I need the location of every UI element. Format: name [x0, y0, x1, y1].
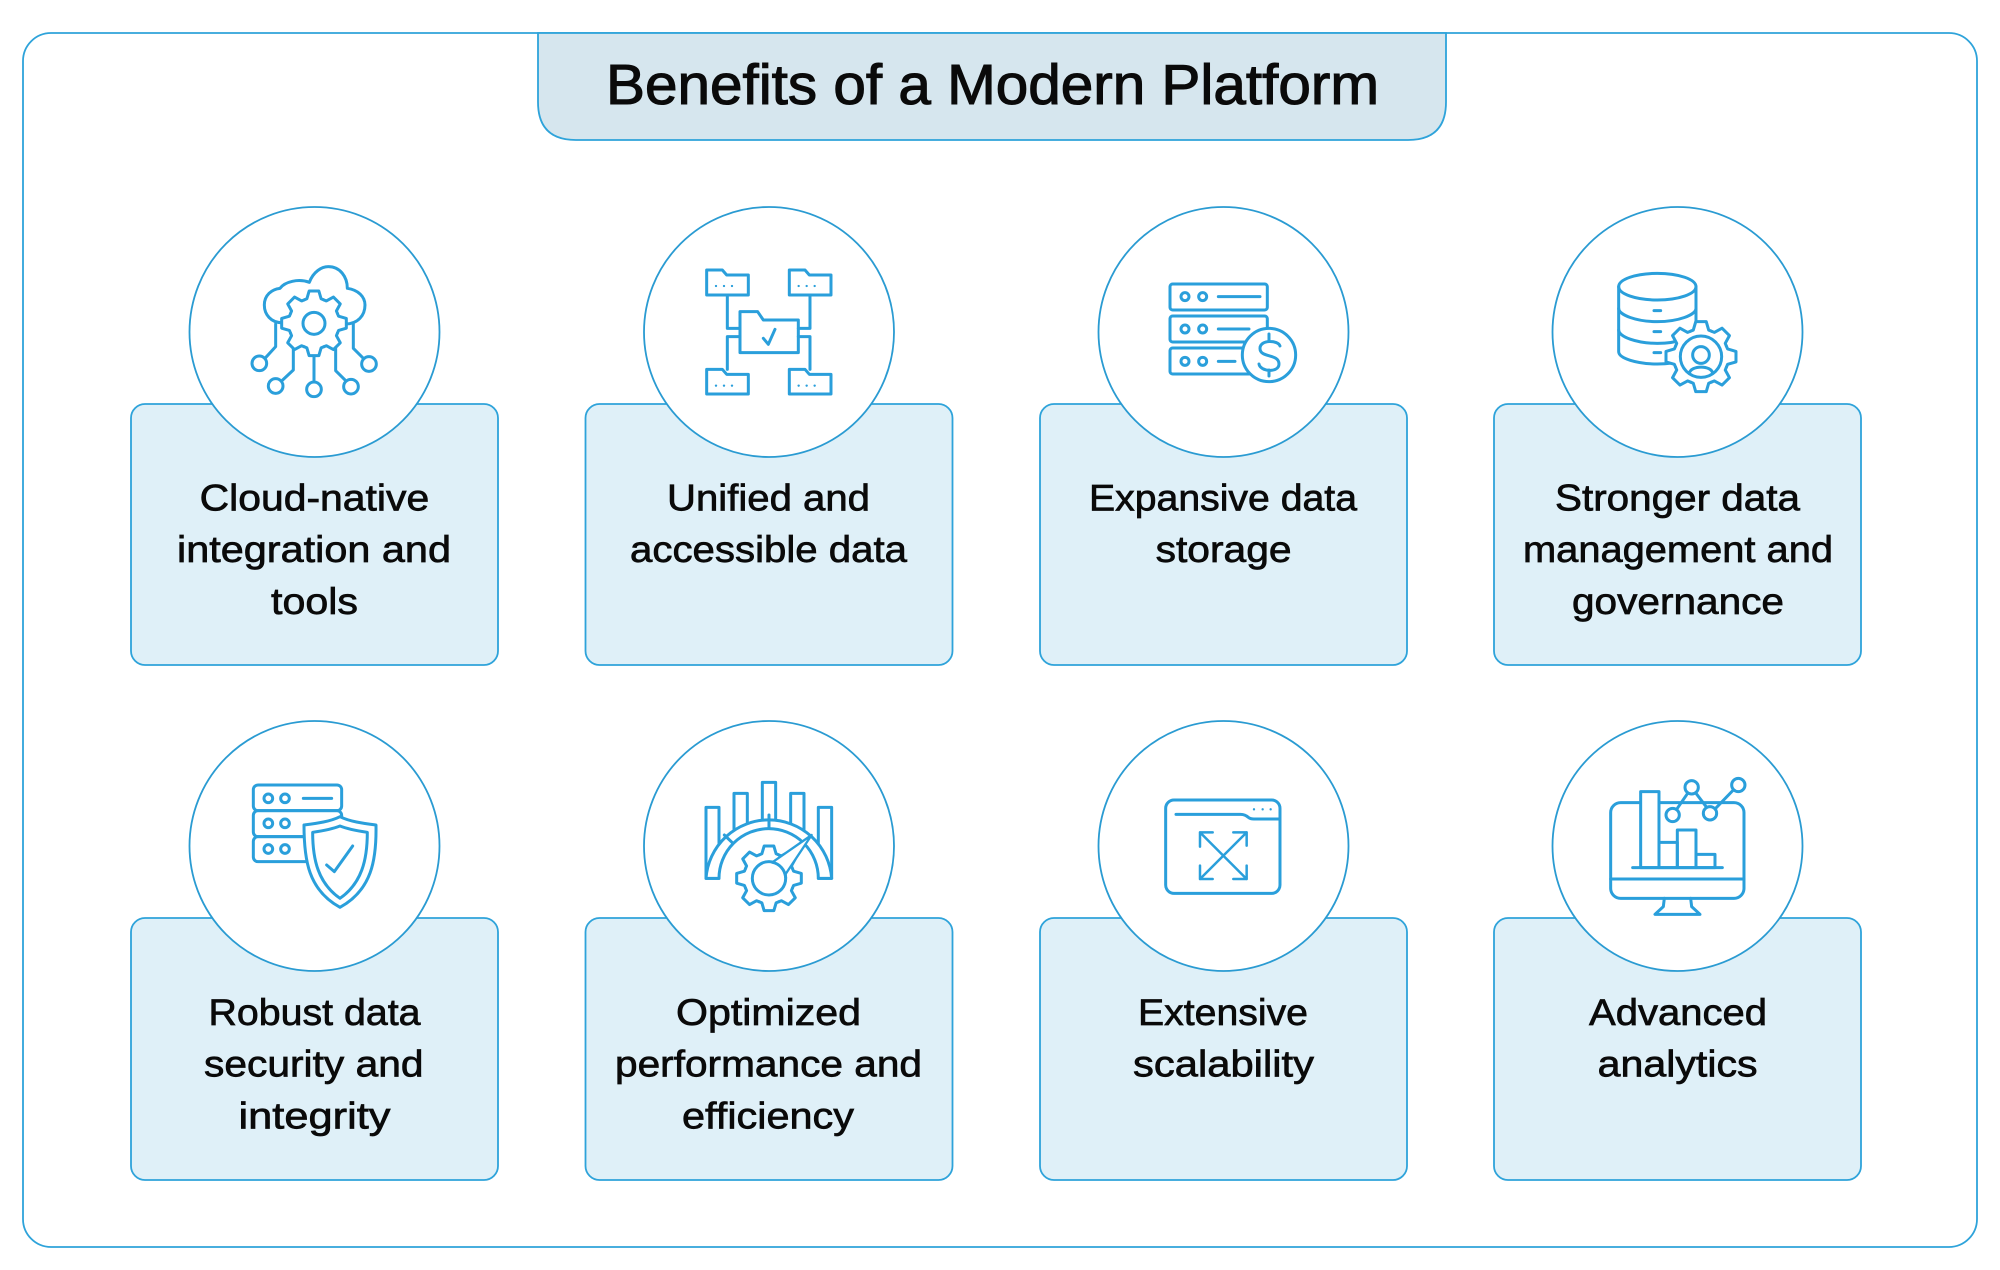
- panel: data governance: [1494, 207, 1861, 665]
- card background: [1040, 404, 1407, 665]
- label: Expansive data: [1089, 478, 1357, 518]
- card background: [1494, 404, 1861, 665]
- card background: [131, 918, 498, 1180]
- icon: gauge with gear and bars: [706, 782, 832, 911]
- panel: expansive storage: [1040, 207, 1407, 665]
- label: governance: [1572, 581, 1784, 622]
- label: [204, 992, 424, 1136]
- label: accessible data: [630, 529, 907, 570]
- card background: [1040, 918, 1407, 1180]
- label: analytics: [1598, 1044, 1758, 1084]
- icon circle: [1098, 721, 1348, 971]
- label: [1589, 992, 1767, 1084]
- label: security and: [204, 1044, 424, 1084]
- label: [615, 992, 922, 1136]
- label: storage: [1156, 529, 1292, 570]
- label: Unified and: [667, 478, 870, 518]
- label: [1523, 478, 1833, 622]
- label: [177, 478, 451, 622]
- label: [1089, 478, 1357, 570]
- card background: [1494, 918, 1861, 1180]
- icon: servers with shield: [253, 785, 376, 907]
- label: management and: [1523, 529, 1833, 570]
- panel: scalability: [1040, 721, 1407, 1180]
- card background: [586, 404, 952, 665]
- label: Optimized: [676, 992, 861, 1033]
- label: Cloud-native: [200, 478, 429, 518]
- label: integrity: [238, 1096, 391, 1136]
- label: scalability: [1133, 1044, 1315, 1084]
- label: [630, 478, 907, 570]
- icon circle: [644, 721, 894, 971]
- panel: analytics: [1494, 721, 1861, 1180]
- icon circle: [1552, 721, 1802, 971]
- icon: connected folders: [707, 270, 831, 394]
- card background: [586, 918, 952, 1180]
- label: Stronger data: [1555, 478, 1800, 518]
- icon: browser window with expand arrows: [1166, 800, 1280, 893]
- icon circle: [1098, 207, 1348, 457]
- icon circle: [1552, 207, 1802, 457]
- icon: cloud with gear and nodes: [252, 267, 376, 397]
- icon circle: [190, 721, 440, 971]
- panel: unified data: [586, 207, 952, 665]
- label: Advanced: [1589, 992, 1767, 1033]
- label: performance and: [615, 1044, 922, 1084]
- panel: data security: [131, 721, 498, 1180]
- icon: servers with dollar coin: [1170, 284, 1296, 382]
- icon circle: [190, 207, 440, 457]
- panel: performance: [586, 721, 952, 1180]
- label: Extensive: [1138, 992, 1308, 1033]
- title: Benefits of a Modern Platform: [606, 53, 1379, 117]
- panel: cloud-native integration: [131, 207, 498, 665]
- label: tools: [271, 581, 358, 622]
- card background: [131, 404, 498, 665]
- icon circle: [644, 207, 894, 457]
- icon: monitor with charts: [1611, 778, 1745, 914]
- label: efficiency: [682, 1096, 855, 1136]
- title tab: [538, 33, 1446, 140]
- label: [1133, 992, 1315, 1084]
- label: Robust data: [208, 992, 421, 1033]
- label: integration and: [177, 529, 451, 570]
- icon: database with user gear: [1619, 273, 1736, 392]
